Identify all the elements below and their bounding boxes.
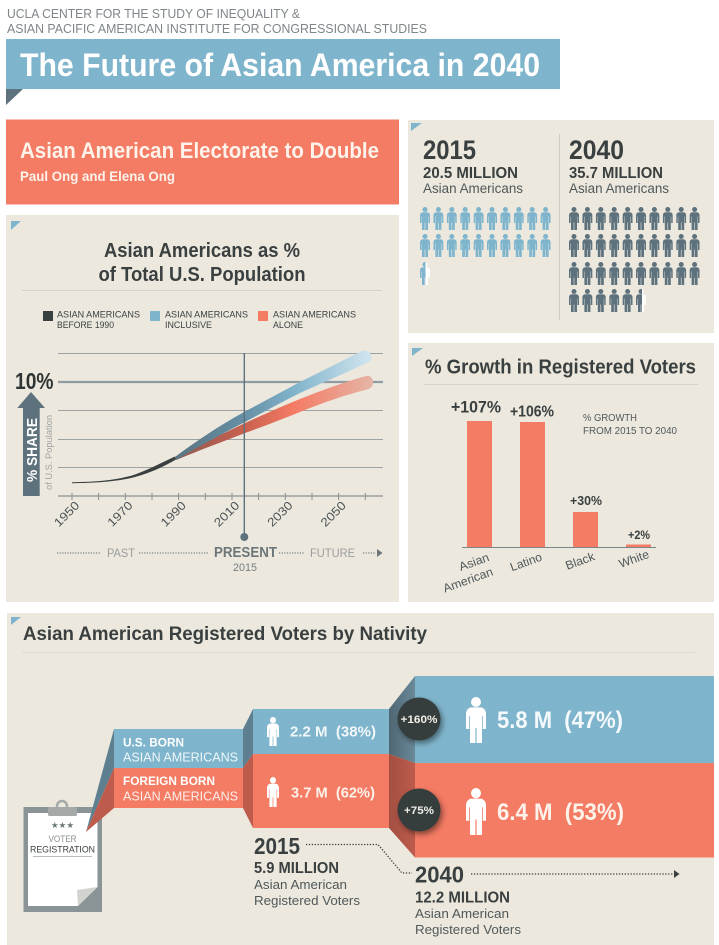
legend: INCLUSIVE [165,320,212,331]
x axis years: 2050 [318,498,349,530]
panel: report title: Paul Ong and Elena Ong [20,168,175,184]
y axis: 10% and share arrow: 10% [15,368,54,394]
arrow: timeline from 2015 to 2040 [306,844,680,878]
bar chart: White [617,547,651,571]
bar chart: +107% [451,398,501,417]
header: organizations [7,6,427,36]
badge: plus 75 percent [398,788,440,832]
pictogram 2040 [569,207,700,312]
bar chart: American [441,565,495,595]
timeline: FUTURE [310,546,355,560]
chart heading [98,240,306,286]
stats 2040: 2040 [569,135,624,165]
bar chart: +106% [510,404,554,421]
curve: before 1990 [72,456,176,483]
pictogram 2015 [420,207,551,285]
stats: 2015 voters: 2015 [254,833,300,859]
stats: 2040 voters [415,862,522,937]
panel: population 2015 vs 2040 [408,120,714,333]
stats: 2040 voters: Registered Voters [415,922,522,937]
chart heading: of Total U.S. Population [98,264,306,286]
ribbon: 2015 segment: 2.2 M (38%) [290,724,376,741]
legend: ALONE [273,320,303,331]
stats: 2040 voters: Asian American [415,906,509,921]
panel: registered voters by nativity [7,613,714,945]
curve: inclusive [175,351,372,460]
timeline: 2015 [233,562,257,574]
growth note: % GROWTH [583,413,637,424]
ribbon: labels segment: FOREIGN BORN [123,774,215,788]
stats: 2015 voters [254,833,361,908]
stats 2040: Asian Americans [569,181,669,196]
x axis years: 1990 [158,498,189,530]
icon: voter registration clipboard: REGISTRATION [30,845,95,856]
stats 2015: 20.5 MILLION [423,165,518,182]
growth note [583,413,677,437]
bar chart [441,398,656,595]
icon: voter registration clipboard: VOTER [48,834,77,845]
timeline [57,544,382,574]
curve: alone [175,376,373,460]
ribbon: labels segment: ASIAN AMERICANS [123,750,238,765]
y axis: 10% and share arrow: % SHARE [24,418,41,482]
timeline: PAST [107,546,136,560]
timeline: PRESENT [214,544,277,561]
ribbon: labels segment [86,729,243,832]
title banner: The Future of Asian America in 2040 [20,47,540,83]
stats 2015 [423,135,523,196]
x axis years: 2010 [211,498,243,530]
ribbon: 2040 segment [389,676,714,858]
stats: 2040 voters: 12.2 MILLION [415,890,510,907]
y axis: 10% and share arrow: of U.S. Population [44,415,55,490]
bar chart: +2% [628,530,650,542]
badge: plus 160 percent [398,698,440,740]
legend [43,310,356,331]
stats: 2015 voters: Registered Voters [254,893,361,908]
title banner [6,39,560,105]
stats: 2015 voters: 5.9 MILLION [254,860,339,877]
icon: voter registration clipboard: ★★★ [51,820,74,830]
panel: population share chart [6,215,399,602]
badge: plus 75 percent: +75% [404,805,434,817]
ribbon: 2040 segment: 5.8 M (47%) [497,707,623,734]
ribbon: labels segment: ASIAN AMERICANS [123,789,238,804]
legend: ASIAN AMERICANS [57,310,140,320]
x axis years [51,498,349,530]
x axis years: 1970 [104,498,136,530]
bar chart: +30% [570,493,602,508]
badge: plus 160 percent: +160% [400,714,438,726]
ribbon: 2015 segment: 3.7 M (62%) [291,784,375,801]
chart heading: Asian Americans as % [104,240,300,262]
icon: voter registration clipboard [24,801,102,912]
stats 2015: Asian Americans [423,181,523,196]
header: organizations: UCLA CENTER FOR THE STUDY OF INEQUALITY & [7,6,300,21]
icon: person [267,777,279,807]
legend: ASIAN AMERICANS [273,310,356,320]
panel: report title: Asian American Electorate to Double [20,138,379,163]
header: organizations: ASIAN PACIFIC AMERICAN INSTITUTE FOR CONGRESSIONAL STUDIES [7,21,427,36]
x axis years: 2030 [264,498,296,530]
ribbon: 2040 segment: 6.4 M (53%) [497,799,624,826]
ribbon: labels segment: U.S. BORN [123,736,184,750]
bar chart: Asian [457,550,491,574]
icon: person [466,788,486,835]
stats: 2040 voters: 2040 [415,862,464,888]
icon: person [267,717,279,746]
nativity heading: Asian American Registered Voters by Nativity [23,623,427,645]
x axis years: 1950 [51,498,83,530]
legend: ASIAN AMERICANS [165,310,248,320]
stats 2015: 2015 [423,135,476,165]
growth heading: % Growth in Registered Voters [425,356,696,378]
panel: report title [6,120,399,204]
icon: person [466,697,486,743]
bar chart: Black [564,549,597,573]
panel: growth in registered voters [408,343,714,602]
stats: 2015 voters: Asian American [254,877,347,892]
bar chart: Latino [508,550,544,574]
y axis: 10% and share arrow [15,368,55,496]
line chart [58,351,383,541]
stats 2040: 35.7 MILLION [569,165,663,182]
growth note: FROM 2015 TO 2040 [583,426,677,437]
legend: BEFORE 1990 [57,320,114,331]
stats 2040 [569,135,669,196]
ribbon: 2015 segment [243,709,389,828]
